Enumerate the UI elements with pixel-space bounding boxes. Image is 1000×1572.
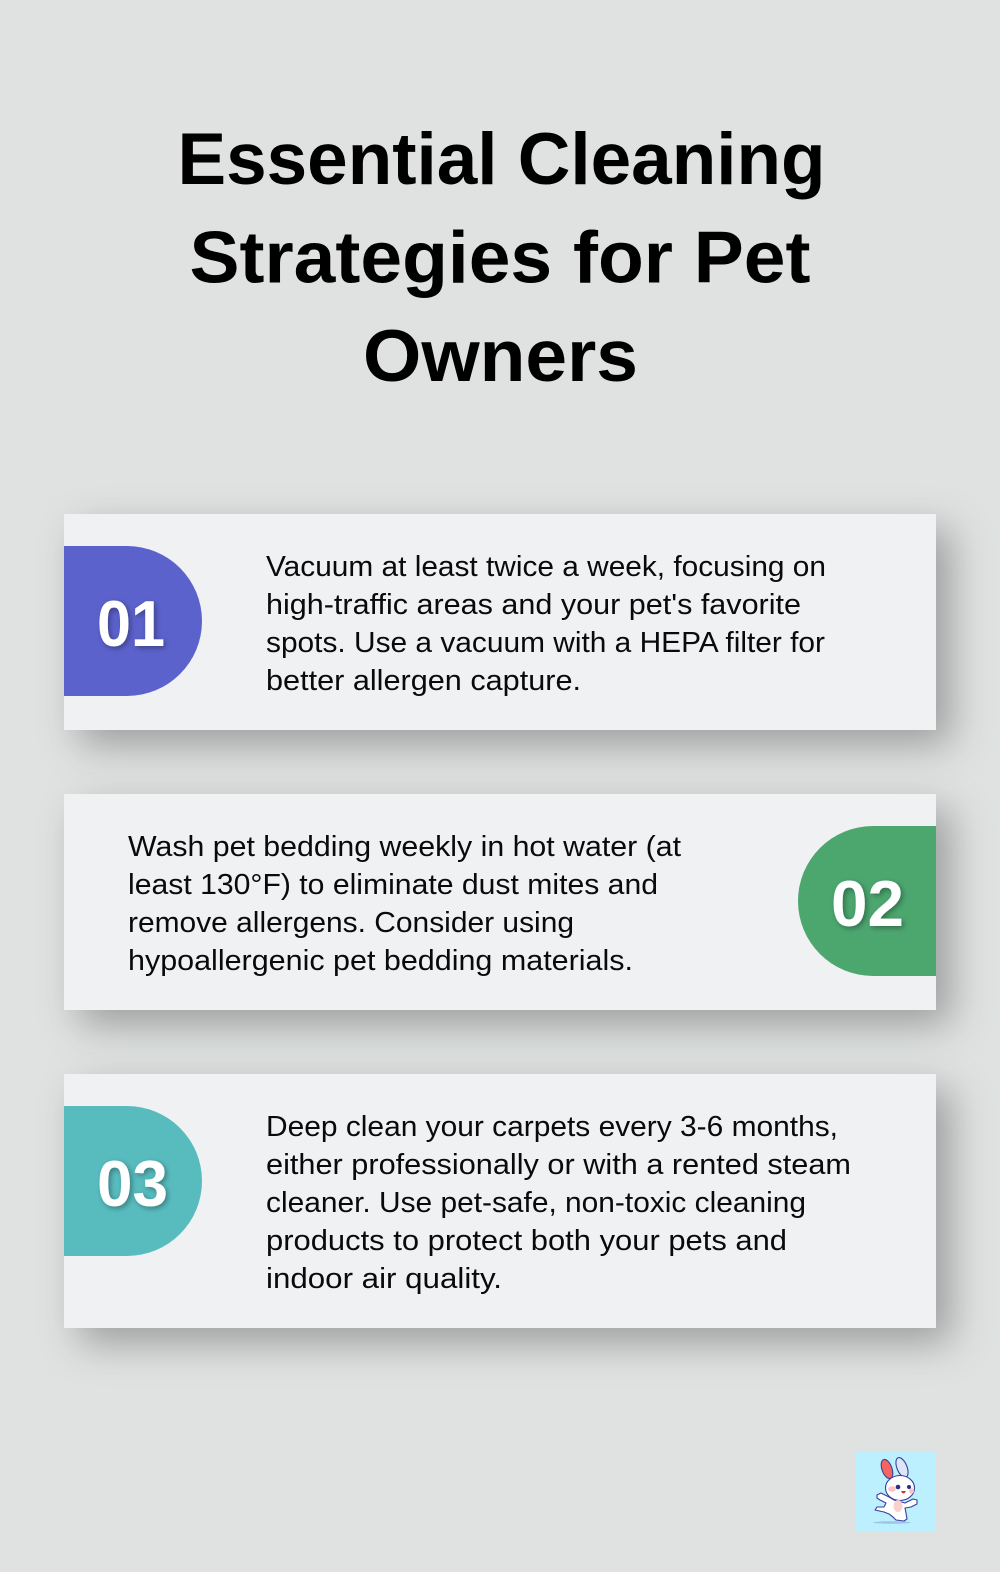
text: step 03 description: products to protect both your pets and [266,1225,787,1257]
title: Strategies for Pet [190,218,810,298]
text: step 02 description: remove allergens. Consider using [128,907,574,939]
title: Owners [363,316,638,397]
text: step 02 description [128,831,681,977]
panel: step 03 [64,1074,936,1328]
panel: step 02 [64,794,936,1010]
text: step 01 description: spots. Use a vacuum with a HEPA filter for [266,627,825,659]
badge: 01: 01 [97,587,165,660]
badge: 03: 03 [97,1147,168,1220]
text: step 01 description: high-traffic areas and your pet's favorite [266,589,801,621]
text: step 03 description: Deep clean your carpets every 3-6 months, [266,1111,838,1143]
text: step 01 description: better allergen capture. [266,665,581,697]
title [178,119,826,397]
text: step 03 description: cleaner. Use pet-safe, non-toxic cleaning [266,1187,806,1219]
text: step 02 description: Wash pet bedding weekly in hot water (at [128,831,681,863]
badge: 02 [798,826,936,976]
text: step 01 description: Vacuum at least twice a week, focusing on [266,551,826,583]
title: Essential Cleaning [178,119,826,200]
text: step 03 description [266,1111,851,1295]
text: step 03 description: either professionally or with a rented steam [266,1149,851,1181]
text: step 02 description: least 130°F) to eliminate dust mites and [128,869,658,901]
badge: 01 [64,546,202,696]
badge: 02: 02 [831,867,904,940]
text: step 03 description: indoor air quality. [266,1263,502,1295]
text: step 01 description [266,551,826,697]
text: step 02 description: hypoallergenic pet bedding materials. [128,945,633,977]
badge: 03 [64,1106,202,1256]
panel: step 01 [64,514,936,730]
icon: running bunny logo [856,1452,936,1532]
